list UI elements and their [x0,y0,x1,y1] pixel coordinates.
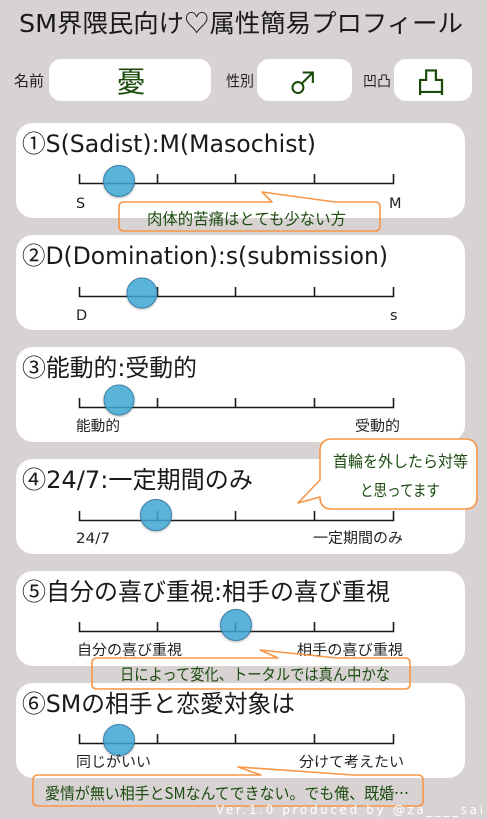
marker 2 [127,278,157,308]
callout 6 [33,767,423,806]
scale 5 [80,622,394,632]
profile row [14,59,472,103]
callout 1: 肉体的苦痛はとても少ない方 [147,206,346,230]
right label 6: 分けて考えたい [299,754,404,771]
type value: 凸 [416,66,446,101]
marker 1 [104,166,134,196]
scale 4 [80,511,394,520]
type box [394,59,472,101]
name label: 名前 [14,72,44,90]
heading 6: ⑥SMの相手と恋愛対象は [22,684,295,719]
left label 5: 自分の喜び重視 [77,642,183,659]
panel: item 5 [16,571,465,666]
icon: male symbol: ♂ [288,59,318,103]
callout 1 [119,192,380,231]
heading 1: ①S(Sadist):M(Masochist) [22,124,316,159]
gender box [257,59,352,101]
marker 4 [140,500,172,530]
panel: item 3 [16,347,465,442]
callout 6: 愛情が無い相手とSMなんてできない。でも俺、既婚… [45,780,409,804]
left label 4: 24/7 [76,531,110,547]
callout 4: 首輪を外したら対等 [333,448,468,472]
type label: 凹凸 [363,72,391,90]
panel: item 2 [16,235,465,330]
left label 3: 能動的 [76,418,120,435]
panel: item 4 [16,459,465,554]
scale 3 [80,398,394,408]
gender label: 性別 [226,72,254,90]
panel: item 6 [16,683,465,778]
marker 5 [220,610,252,640]
heading 4: ④24/7:一定期間のみ [22,460,253,495]
marker 3 [104,385,134,415]
right label 4: 一定期間のみ [313,530,403,547]
scale 1 [80,174,394,184]
name value: 憂 [116,65,146,99]
right label 5: 相手の喜び重視 [297,642,404,659]
footer credit: Ver.1.0 produced by @za____sai [216,803,483,817]
callout 5 [92,650,410,689]
heading 3: ③能動的:受動的 [22,348,197,383]
panel: item 1 [16,123,465,218]
right label 1: M [389,196,402,212]
title: SM界隈民向け♡属性簡易プロフィール [19,4,463,40]
scale 6 [80,734,394,744]
marker 6 [104,724,134,756]
right label 3: 受動的 [355,418,400,435]
left label 1: S [76,196,85,212]
left label 2: D [76,308,87,324]
scale 2 [80,287,394,296]
callout 4: と思ってます [360,477,440,501]
right label 2: s [390,308,398,324]
callout 4 [298,439,477,509]
name box [49,59,211,101]
callout 5: 日によって変化、トータルでは真ん中かな [120,661,390,685]
left label 6: 同じがいい [76,754,151,771]
heading 5: ⑤自分の喜び重視:相手の喜び重視 [22,572,390,607]
heading 2: ②D(Domination):s(submission) [22,236,388,271]
